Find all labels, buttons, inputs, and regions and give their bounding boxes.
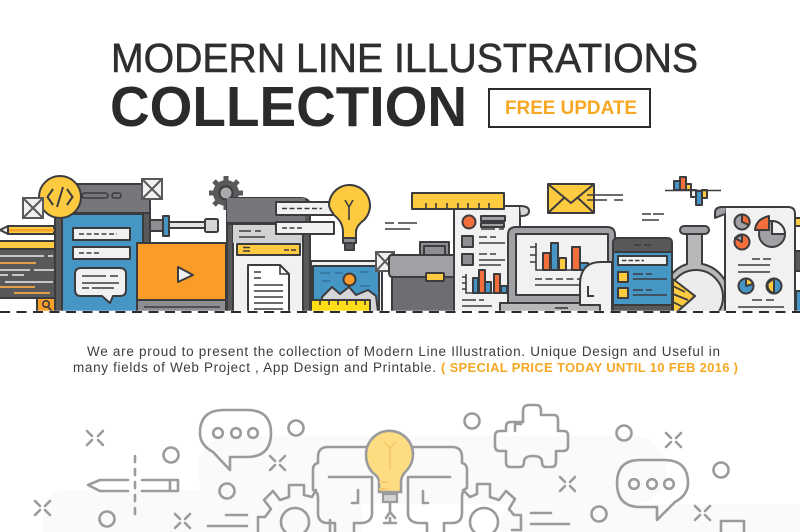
icon: phone — [613, 238, 672, 312]
dash lines right — [531, 513, 569, 524]
title line 2: COLLECTION — [110, 75, 467, 139]
icon: image placeholder small — [376, 252, 394, 271]
sparkles — [35, 431, 710, 528]
puzzle piece — [495, 405, 568, 467]
icon: flask — [673, 225, 724, 311]
icon: image placeholder left — [23, 198, 43, 218]
icon: envelope — [548, 184, 623, 213]
icon: pencil — [0, 226, 54, 234]
dashes left of briefcase — [385, 223, 417, 229]
head left — [313, 447, 372, 532]
square outline — [721, 521, 744, 532]
special price callout: ( SPECIAL PRICE TODAY UNTIL 10 FEB 2016 ) — [441, 360, 738, 375]
title line 1: MODERN LINE ILLUSTRATIONS — [111, 35, 698, 81]
gear right — [463, 484, 521, 532]
icon: yellow ruler small — [311, 300, 370, 312]
icon: small bar chart — [665, 177, 721, 205]
icon: picture frame — [311, 261, 382, 312]
gear left — [258, 485, 330, 532]
background blobs — [43, 436, 800, 532]
speech bubble right — [617, 460, 688, 520]
icon: browser window with form — [55, 184, 150, 312]
central light bulb — [366, 431, 413, 523]
icon: image placeholder right — [142, 179, 162, 199]
icon: pie chart report — [715, 207, 795, 312]
icon: label bars — [276, 202, 334, 234]
icon: right edge fragment — [796, 217, 800, 311]
pencil outline — [88, 456, 178, 515]
dash lines left — [208, 515, 247, 526]
icon: code editor — [0, 241, 57, 312]
speech bubble left — [200, 410, 271, 470]
icon: document window — [227, 198, 310, 312]
illustration banner — [0, 176, 800, 324]
icon: gear — [209, 176, 243, 210]
icon: top ruler — [412, 193, 504, 209]
icon: report document — [454, 206, 529, 312]
icon: code badge — [39, 176, 81, 218]
lower illustration — [35, 405, 800, 532]
dashes — [642, 214, 664, 220]
icon: head profile — [580, 262, 612, 312]
icon: video player — [137, 243, 226, 312]
small circles — [100, 414, 728, 526]
description paragraph — [73, 344, 738, 375]
description paragraph: We are proud to present the collection of Modern Line Illustration. Unique Design and Useful in — [87, 344, 720, 359]
icon: laptop — [500, 227, 615, 312]
icon: screwdriver — [150, 216, 218, 236]
description paragraph: many fields of Web Project , App Design and Printable. — [73, 360, 436, 375]
dashed baseline — [0, 311, 800, 313]
icon: light bulb — [329, 185, 370, 250]
head right — [408, 447, 467, 532]
free update badge — [489, 89, 650, 127]
icon: briefcase — [389, 242, 455, 312]
free update badge: FREE UPDATE — [505, 97, 637, 119]
icon: flask stripes overlay — [673, 279, 695, 312]
